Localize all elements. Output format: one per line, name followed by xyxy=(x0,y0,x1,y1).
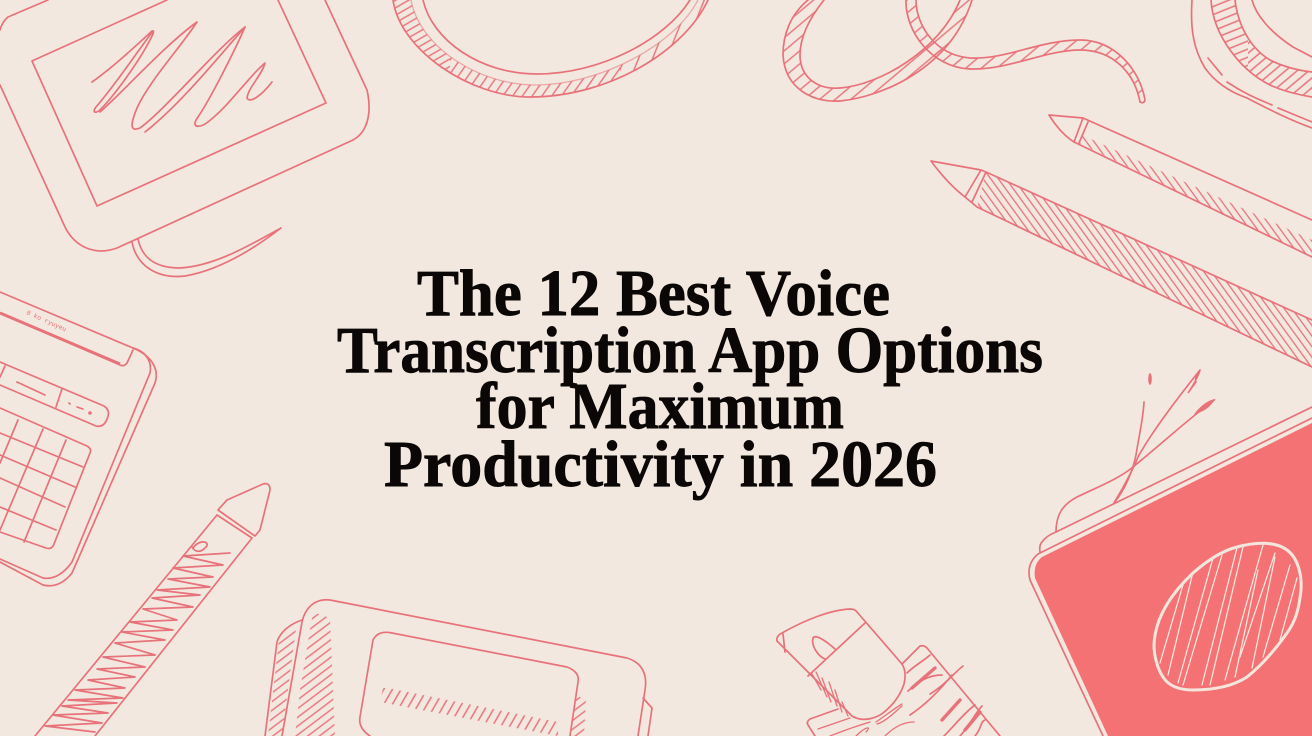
icon: red notebook xyxy=(1029,370,1312,736)
title: for Maximum xyxy=(476,370,844,443)
icon: bottom eraser xyxy=(777,609,1000,736)
icon: tablet with scribble xyxy=(0,0,369,276)
title: Transcription App Options xyxy=(337,314,1043,387)
title: Productivity in 2026 xyxy=(384,428,937,501)
icon: lower-left pencil xyxy=(35,484,270,736)
icon: hatched oval xyxy=(1154,543,1301,690)
icon: calculator keyboard xyxy=(0,292,156,586)
icon: top ring xyxy=(393,0,708,97)
text: tiny device label: 8 ko ryuyeu xyxy=(25,309,67,333)
title: The 12 Best Voice xyxy=(417,257,890,330)
icon: lower pencil xyxy=(931,161,1312,367)
icon: upper pencil xyxy=(1049,115,1312,257)
icon: bottom book xyxy=(265,600,652,736)
title xyxy=(337,257,1043,501)
icon: looping rope xyxy=(783,0,1145,103)
icon: top-right ring xyxy=(1192,0,1312,128)
